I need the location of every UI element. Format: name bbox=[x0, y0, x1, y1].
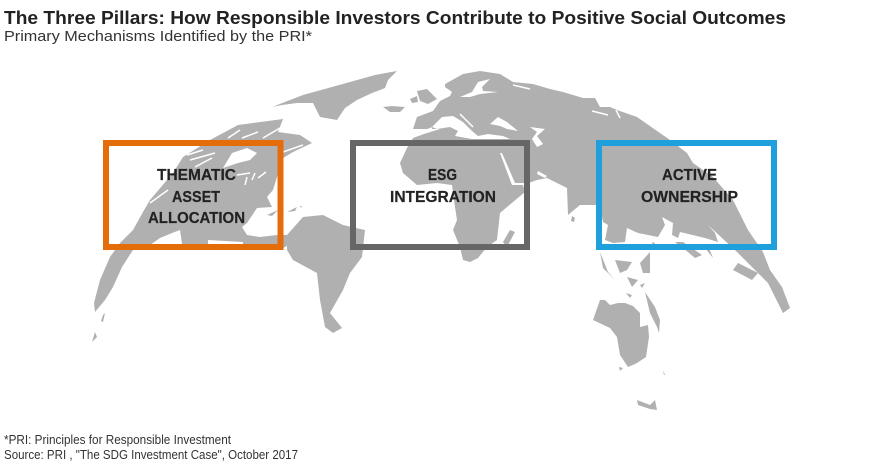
map detail: Black Sea bbox=[490, 117, 518, 131]
label: thematic asset allocation: ASSET bbox=[172, 189, 220, 206]
map: Sri Lanka bbox=[571, 216, 575, 222]
map detail: Persian Gulf bbox=[537, 171, 547, 178]
map detail: Arctic channels bbox=[150, 85, 620, 203]
map: Southeast Asian islands bbox=[600, 242, 713, 298]
map: Greenland bbox=[272, 71, 397, 120]
map detail: Caspian Sea bbox=[530, 127, 545, 147]
box: thematic asset allocation bbox=[106, 143, 280, 247]
map detail: Baltic Sea bbox=[460, 79, 498, 97]
footnote: *PRI: Principles for Responsible Investment bbox=[4, 433, 231, 447]
map: eastern landmass bbox=[645, 292, 660, 333]
map detail: southern bay bbox=[208, 240, 243, 250]
map: North America bbox=[94, 119, 312, 312]
map: South America bbox=[287, 215, 365, 333]
label: ESG integration: ESG bbox=[428, 167, 457, 184]
map detail: Red Sea bbox=[500, 153, 525, 185]
map: Japan-like island bbox=[733, 263, 758, 280]
map: Britain bbox=[417, 89, 437, 104]
map detail: Gulf bbox=[143, 230, 183, 250]
map: Eurasia and Africa bbox=[400, 71, 790, 313]
label: ESG integration: INTEGRATION bbox=[390, 189, 496, 206]
label: thematic asset allocation: ALLOCATION bbox=[148, 210, 245, 227]
map: Iceland bbox=[383, 106, 405, 112]
world map bbox=[92, 71, 790, 410]
map detail: Mediterranean bbox=[432, 116, 510, 139]
label: active ownership: ACTIVE bbox=[662, 167, 717, 184]
map: Madagascar bbox=[503, 230, 515, 247]
source: Source: PRI , "The SDG Investment Case", October 2017 bbox=[4, 448, 298, 462]
box: active ownership bbox=[599, 143, 774, 247]
subtitle: Primary Mechanisms Identified by the PRI* bbox=[4, 28, 312, 45]
box: ESG integration bbox=[353, 143, 527, 247]
map: small southern islands bbox=[619, 367, 685, 410]
map: North America outlying islands bbox=[92, 206, 302, 342]
map: Australia bbox=[593, 300, 649, 367]
map detail: Hudson Bay bbox=[223, 148, 257, 168]
map: Ireland bbox=[410, 96, 418, 103]
title: The Three Pillars: How Responsible Investors Contribute to Positive Social Outcomes bbox=[4, 7, 786, 28]
label: active ownership: OWNERSHIP bbox=[641, 189, 738, 206]
label: thematic asset allocation: THEMATIC bbox=[157, 167, 236, 184]
